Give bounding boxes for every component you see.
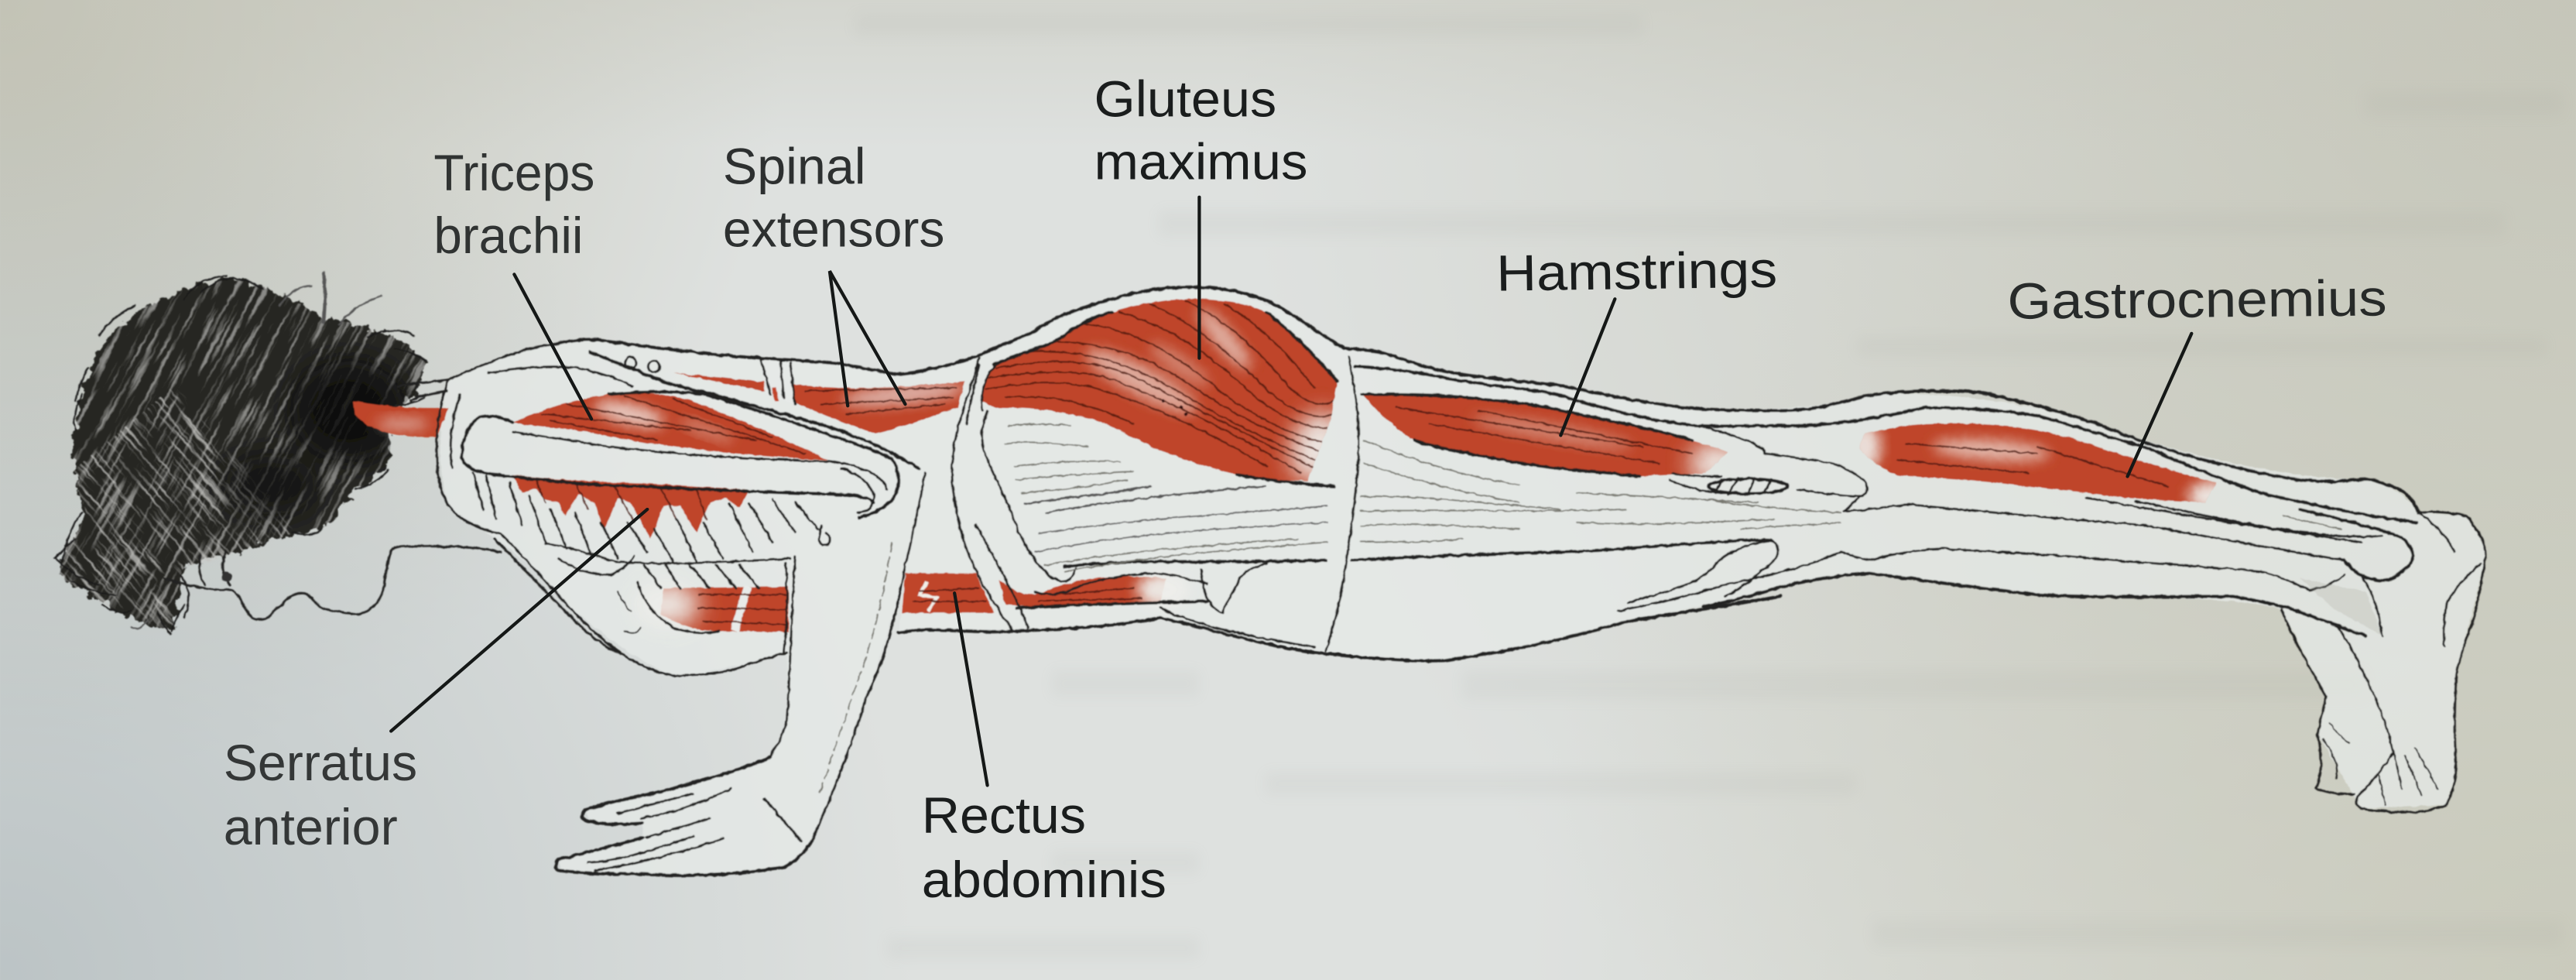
forearm and hand outlines xyxy=(556,473,925,875)
label: Serratus anterior: Serratus xyxy=(224,734,417,791)
muscle: triceps brachii xyxy=(512,393,828,460)
label: Triceps brachii: brachii xyxy=(433,207,583,264)
label: Rectus abdominis: abdominis xyxy=(922,851,1166,908)
label: Triceps brachii xyxy=(433,144,594,419)
label: Gastrocnemius xyxy=(2007,269,2387,476)
label: Triceps brachii: Triceps xyxy=(433,144,594,201)
shorts and hip outlines xyxy=(899,357,1841,661)
label: Gluteus maximus: Gluteus xyxy=(1094,70,1276,128)
label: Rectus abdominis xyxy=(922,593,1166,908)
shoulder and upper arm outlines xyxy=(437,351,918,675)
muscle: neck xyxy=(353,401,448,437)
muscle: spinal extensors xyxy=(673,360,967,433)
label: Gluteus maximus: maximus xyxy=(1094,132,1307,190)
muscle: rectus abdominis xyxy=(634,572,1190,632)
label: Serratus anterior: anterior xyxy=(224,798,398,855)
label: Rectus abdominis: Rectus xyxy=(922,786,1086,844)
label: Spinal extensors: extensors xyxy=(723,200,944,257)
label: Gastrocnemius: Gastrocnemius xyxy=(2007,269,2387,330)
thigh and pelvis fibre shading xyxy=(1005,424,2341,572)
body silhouette xyxy=(440,287,2485,874)
muscle: gastrocnemius xyxy=(1859,422,2217,503)
figure in plank pose xyxy=(53,270,2488,879)
hair xyxy=(53,270,429,636)
muscle: serratus anterior xyxy=(512,475,749,539)
face profile and neck xyxy=(164,340,609,619)
foot outlines xyxy=(2282,512,2485,812)
label: Gluteus maximus xyxy=(1094,70,1307,358)
label: Spinal extensors: Spinal xyxy=(723,138,866,195)
muscle: hamstrings xyxy=(1362,394,1745,485)
ribs xyxy=(473,473,818,653)
label: Hamstrings xyxy=(1496,241,1778,435)
back and leg outlines xyxy=(552,287,2418,636)
muscle: gluteus maximus xyxy=(982,299,1355,490)
label: Serratus anterior xyxy=(224,509,647,855)
label: Hamstrings: Hamstrings xyxy=(1496,241,1778,302)
label: Spinal extensors xyxy=(723,138,944,406)
